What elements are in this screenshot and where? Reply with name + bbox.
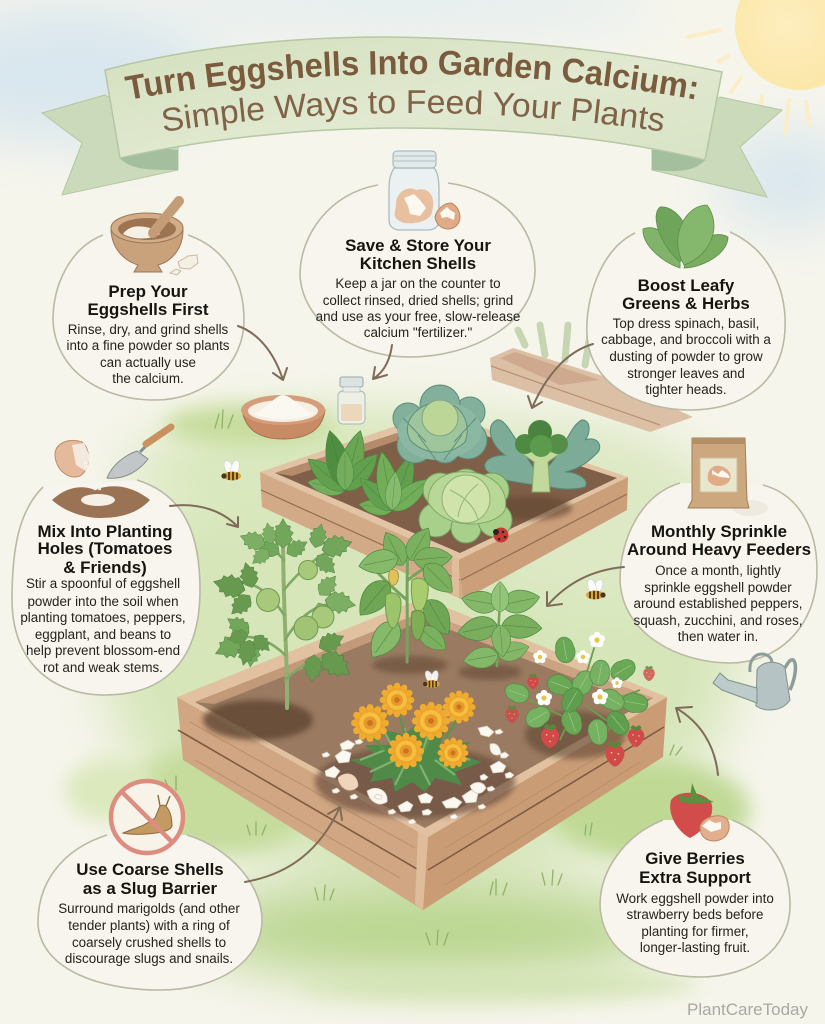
boost body text: dusting of powder to grow (609, 349, 763, 364)
arrow: berries to strawberry (676, 707, 718, 775)
watermark: PlantCareToday (687, 1000, 808, 1019)
panel: prep your eggshells (53, 235, 244, 400)
spinach plant left (302, 428, 384, 498)
sun (688, 0, 825, 133)
save body text: Keep a jar on the counter to (335, 276, 501, 291)
monthly body text: squash, zucchini, and roses, (634, 613, 802, 628)
boost body text: stronger leaves and (627, 366, 745, 381)
soil patches (203, 656, 625, 818)
boost body text: tighter heads. (645, 382, 727, 397)
save body text: collect rinsed, dried shells; grind (323, 293, 513, 308)
small jar (338, 377, 365, 424)
berries heading: Give Berries (645, 849, 745, 868)
blue-green cabbage (393, 385, 487, 463)
save body text: calcium "fertilizer." (364, 325, 472, 340)
mix body text: Stir a spoonful of eggshell (26, 576, 180, 591)
powder bowl (241, 395, 325, 439)
prep heading: Eggshells First (87, 300, 209, 319)
mix body text: help prevent blossom-end (26, 643, 180, 658)
slug body text: tender plants) with a ring of (68, 918, 230, 933)
eggshell ring (322, 726, 514, 824)
spinach plant right (354, 450, 435, 517)
monthly body text: around established peppers, (634, 596, 802, 611)
icon: strawberry and eggshell (670, 783, 729, 841)
banner: ribbon tails (42, 95, 782, 197)
prep body text: the calcium. (112, 371, 184, 386)
monthly heading: Around Heavy Feeders (627, 540, 811, 559)
berries body text: strawberry beds before (627, 907, 763, 922)
icon: watering can (713, 654, 795, 710)
slug heading: Use Coarse Shells (76, 860, 224, 879)
icon: no slugs sign (111, 781, 183, 853)
basil plant (455, 582, 543, 671)
slug body text: coarsely crushed shells to (72, 935, 226, 950)
panel: boost leafy greens (587, 232, 785, 410)
icon: jar of eggshells (389, 151, 460, 230)
mix heading: Holes (Tomatoes (38, 539, 172, 558)
arrow: prep to bowl (238, 326, 287, 380)
monthly heading: Monthly Sprinkle (651, 522, 787, 541)
panel: mix into planting holes (12, 480, 200, 695)
boost heading: Boost Leafy (638, 276, 735, 295)
save body text: and use as your free, slow-release (316, 309, 520, 324)
mix body text: eggplant, and beans to (35, 627, 171, 642)
panel: save and store (300, 183, 535, 357)
prep heading: Prep Your (108, 282, 188, 301)
monthly body text: sprinkle eggshell powder (644, 580, 792, 595)
icon: bag of eggshell powder (688, 438, 768, 516)
arrow: monthly to pepper (547, 567, 624, 606)
ladybug (493, 528, 508, 542)
save heading: Kitchen Shells (360, 254, 476, 273)
berries body text: longer-lasting fruit. (640, 940, 750, 955)
slug heading: as a Slug Barrier (83, 879, 218, 898)
title line 2: Simple Ways to Feed Your Plants (163, 90, 664, 131)
prep body text: can actually use (100, 355, 196, 370)
broccoli (485, 420, 600, 492)
boost heading: Greens & Herbs (622, 294, 750, 313)
panel: slug barrier (38, 835, 262, 990)
slug body text: discourage slugs and snails. (65, 951, 233, 966)
marigolds (350, 686, 482, 792)
arrow: mix to tomato (170, 505, 238, 527)
arrow: slug to bed (245, 807, 342, 882)
bees (221, 459, 606, 688)
title line 1: Turn Eggshells Into Garden Calcium: (124, 50, 697, 100)
banner: main ribbon (105, 37, 722, 160)
icon: eggshell, trowel and soil (52, 427, 171, 518)
arrow: boost to bed (528, 344, 593, 408)
monthly body text: Once a month, lightly (655, 563, 781, 578)
icon: spinach leaves (643, 205, 728, 268)
mix body text: powder into the soil when (27, 594, 179, 609)
mix body text: rot and weak stems. (43, 660, 163, 675)
mix heading: Mix Into Planting (37, 522, 173, 541)
monthly body text: then water in. (678, 629, 758, 644)
save heading: Save & Store Your (345, 236, 491, 255)
berries body text: planting for firmer, (641, 924, 749, 939)
panel: give berries support (600, 820, 790, 977)
background raised bed (490, 325, 693, 432)
pepper plant (351, 523, 460, 665)
icon: mortar and pestle (111, 201, 198, 275)
boost body text: Top dress spinach, basil, (613, 316, 759, 331)
berries body text: Work eggshell powder into (616, 891, 774, 906)
tomato plant (202, 512, 369, 708)
mix heading: & Friends) (63, 558, 147, 577)
grass tufts (165, 410, 682, 945)
back raised bed (260, 412, 628, 600)
boost body text: cabbage, and broccoli with a (601, 332, 771, 347)
green cabbage (419, 469, 512, 543)
slug body text: Surround marigolds (and other (58, 901, 240, 916)
front raised bed (177, 598, 667, 910)
prep body text: into a fine powder so plants (66, 338, 230, 353)
prep body text: Rinse, dry, and grind shells (68, 322, 229, 337)
arrow: save to jar (373, 345, 392, 379)
berries heading: Extra Support (639, 868, 751, 887)
strawberry plant (502, 632, 655, 766)
panel: monthly sprinkle (620, 483, 817, 663)
mix body text: planting tomatoes, peppers, (20, 610, 186, 625)
